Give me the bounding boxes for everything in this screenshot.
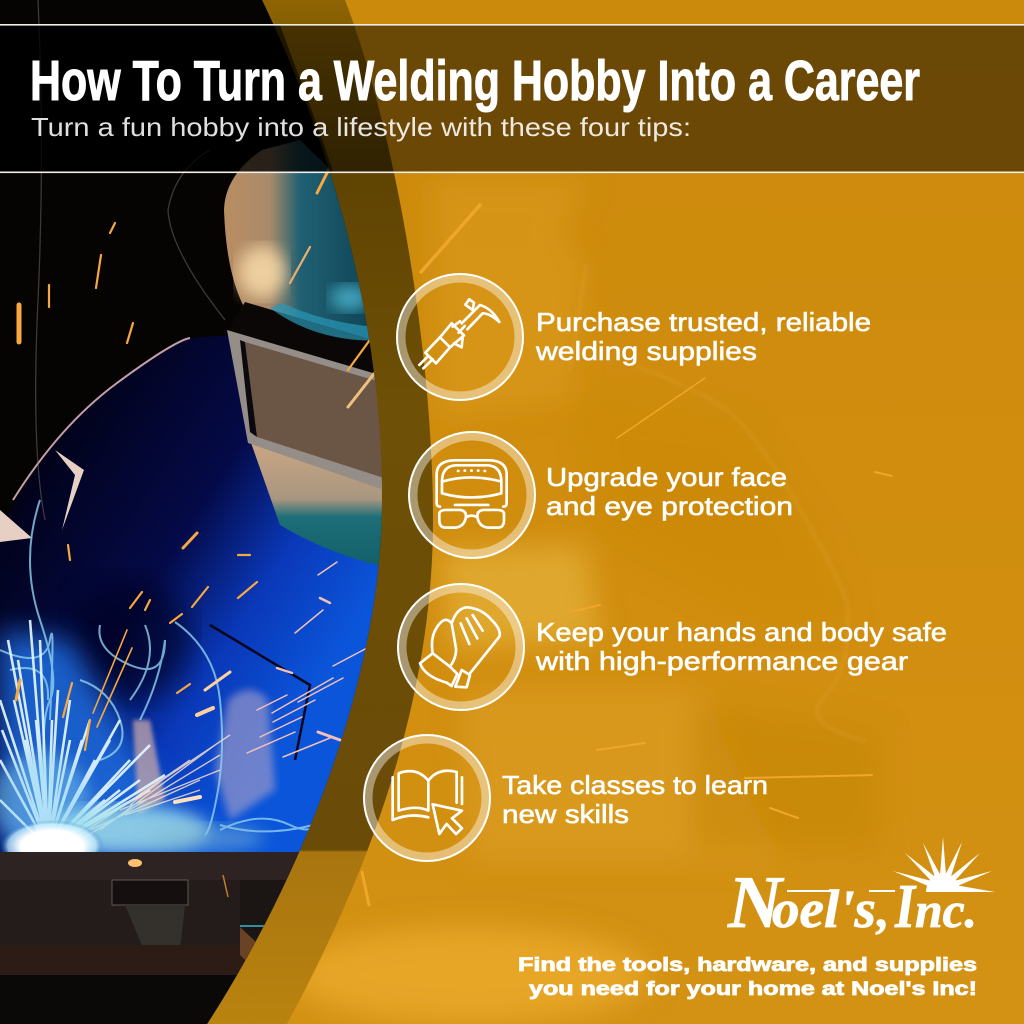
spark glow bbox=[40, 806, 210, 854]
faint figure outlines bbox=[570, 264, 867, 741]
steel table bbox=[207, 852, 299, 1024]
flying sparks bbox=[16, 157, 377, 802]
header band with rules bbox=[0, 24, 1024, 173]
Noel's Inc logo bbox=[727, 837, 995, 944]
icon: welding glove bbox=[398, 584, 524, 710]
logo wordmark: nc. bbox=[915, 882, 977, 938]
tip 1 text: welding supplies bbox=[535, 336, 757, 366]
icon: face shield and goggles bbox=[409, 432, 535, 558]
icon: sun rays bbox=[893, 837, 995, 892]
icon: welding torch bbox=[397, 274, 523, 400]
shoulder outline bbox=[13, 338, 190, 500]
tip 2: face and eye protection bbox=[409, 432, 793, 558]
tip 3 text: with high-performance gear bbox=[535, 646, 908, 676]
subtitle: Turn a fun hobby into a lifestyle with these four tips: bbox=[31, 112, 691, 142]
burst field bbox=[0, 630, 210, 850]
jacket bbox=[0, 335, 390, 860]
tip 4: classes bbox=[364, 735, 768, 861]
tip 2 text: Upgrade your face bbox=[546, 462, 787, 492]
faded sparks on orange bbox=[362, 205, 892, 905]
icon: book with cursor bbox=[364, 735, 490, 861]
spark burst rays bbox=[0, 620, 165, 848]
smoke trails bbox=[0, 500, 340, 835]
tip 3: hands and body gear bbox=[398, 584, 947, 710]
welding photo bbox=[0, 0, 400, 1024]
tip 4 text: new skills bbox=[502, 799, 629, 829]
tip 1: welding supplies bbox=[397, 274, 871, 400]
logo wordmark: oel's bbox=[772, 879, 876, 939]
tip 1 text: Purchase trusted, reliable bbox=[536, 307, 871, 337]
tip 4 text: Take classes to learn bbox=[502, 770, 768, 800]
orange background with tinted welder photo bbox=[300, 203, 893, 1024]
footer call to action: Find the tools, hardware, and supplies bbox=[518, 955, 977, 976]
logo wordmark: , bbox=[875, 882, 890, 938]
footer call to action: you need for your home at Noel's Inc! bbox=[529, 979, 977, 1000]
logo wordmark: N bbox=[727, 862, 785, 944]
helmet top bbox=[224, 140, 369, 338]
tip 3 text: Keep your hands and body safe bbox=[536, 617, 947, 647]
tip 2 text: and eye protection bbox=[546, 491, 793, 521]
lavender hand bbox=[215, 690, 275, 820]
logo wordmark: I bbox=[894, 873, 917, 941]
helmet lower bbox=[252, 444, 382, 566]
visor bbox=[227, 330, 390, 492]
logo rule lines bbox=[787, 890, 895, 892]
translucent curved band bbox=[200, 0, 433, 1024]
